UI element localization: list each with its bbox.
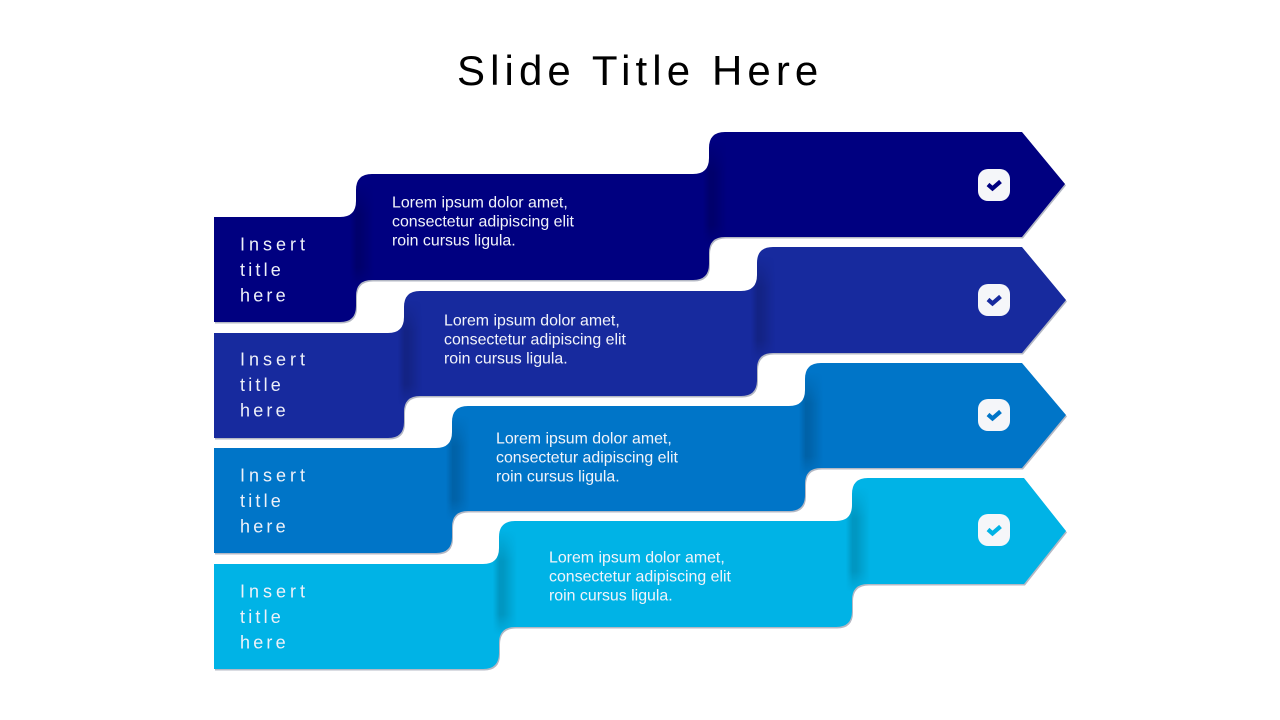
- row 1 description: Lorem ipsum dolor amet,: [392, 194, 568, 212]
- row 3 check icon: [978, 399, 1010, 431]
- row 3 label: title: [240, 491, 284, 511]
- row 1 description: roin cursus ligula.: [392, 232, 516, 250]
- row 2 description: consectetur adipiscing elit: [444, 332, 627, 348]
- row 4 description: consectetur adipiscing elit: [549, 568, 732, 586]
- ribbon arrow 1: navy: [214, 132, 1066, 324]
- row 2 label: here: [240, 400, 289, 420]
- row 3 description: Lorem ipsum dolor amet,: [496, 430, 672, 448]
- row 3 label: here: [240, 516, 289, 536]
- row 3 description: consectetur adipiscing elit: [496, 450, 679, 466]
- ribbon arrow 3: medium blue: [214, 363, 1067, 554]
- row 3 description: roin cursus ligula.: [496, 468, 620, 486]
- ribbon arrow 2: royal blue: [214, 247, 1067, 440]
- row 4 description: roin cursus ligula.: [549, 588, 673, 604]
- row 3 label: Insert: [240, 466, 309, 486]
- row 2 check icon: [978, 284, 1010, 316]
- row 1 label: here: [240, 286, 289, 306]
- row 1 description: consectetur adipiscing elit: [392, 214, 575, 230]
- row 4 label: here: [240, 632, 289, 652]
- row 2 label: title: [240, 375, 284, 395]
- row 4 check icon: [978, 514, 1010, 546]
- row 4 label: Insert: [240, 582, 309, 602]
- row 4 description: Lorem ipsum dolor amet,: [549, 550, 725, 566]
- ribbon arrow 4: light blue: [214, 478, 1067, 670]
- row 2 description: Lorem ipsum dolor amet,: [444, 312, 620, 330]
- row 1 check icon: [978, 169, 1010, 201]
- row 1 label: title: [240, 260, 284, 280]
- row 2 label: Insert: [240, 350, 309, 370]
- row 1 label: Insert: [240, 234, 309, 254]
- title: Slide Title Here: [457, 47, 823, 94]
- row 4 label: title: [240, 607, 284, 627]
- row 2 description: roin cursus ligula.: [444, 350, 568, 368]
